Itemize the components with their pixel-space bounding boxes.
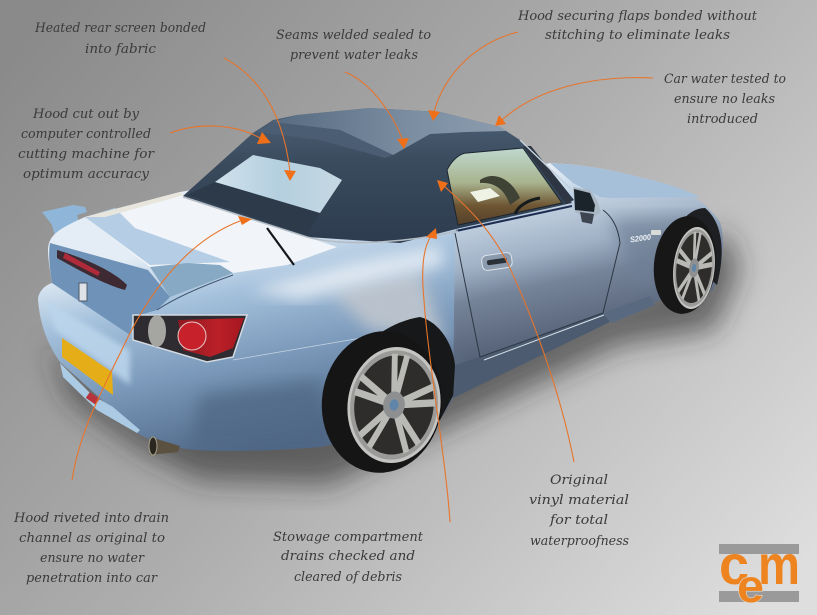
- front wheel: [649, 213, 721, 317]
- fender crease: [233, 337, 367, 360]
- label: original vinyl: for total: [549, 513, 608, 528]
- door outline: [455, 210, 620, 357]
- ground shadow: [48, 230, 740, 485]
- label: original vinyl: Original: [550, 473, 608, 488]
- arrow: original vinyl: [437, 180, 574, 462]
- arrow: heated rear screen: [224, 58, 296, 181]
- label: hood riveted: [13, 511, 169, 586]
- label: hood cut out: [18, 107, 155, 182]
- arrow: riveted: [72, 216, 252, 480]
- roof light top: [272, 108, 506, 155]
- exhaust: [149, 437, 180, 455]
- marker light: [651, 230, 661, 235]
- soft top: [183, 108, 574, 243]
- label: securing flaps: Hood securing flaps bonded without: [517, 9, 758, 24]
- label: stowage compartment: drains checked and: [281, 549, 415, 564]
- deck shading: [85, 208, 230, 265]
- deck top trim: [85, 192, 184, 217]
- label: water tested: [664, 72, 786, 127]
- number plate: [62, 338, 113, 395]
- chrome strip: [183, 197, 458, 243]
- label: hood cut out: computer controlled: [21, 127, 151, 142]
- label: hood riveted: penetration into car: [26, 571, 158, 586]
- interior steering wheel: [515, 198, 540, 214]
- rear panel: [49, 243, 170, 335]
- rear screen glass: [215, 155, 342, 213]
- door mirror: [573, 187, 601, 224]
- centre brake light: [57, 250, 127, 290]
- label: hood riveted: channel as original to: [19, 531, 165, 546]
- label: seams welded: prevent water leaks: [290, 48, 418, 63]
- arrow: securing flaps: [428, 32, 518, 121]
- label: hood cut out: cutting machine for: [18, 147, 155, 162]
- car with ground shadow: [38, 108, 740, 485]
- label: heated rear screen: into fabric: [85, 42, 157, 57]
- label: original vinyl: waterproofness: [530, 534, 629, 549]
- rear wheel: [313, 323, 451, 481]
- label: stowage compartment: Stowage compartment: [273, 530, 424, 545]
- label: hood riveted: ensure no water: [40, 551, 145, 566]
- label: hood cut out: Hood cut out by: [32, 107, 140, 122]
- antenna: [267, 228, 294, 265]
- label: securing flaps: stitching to eliminate leaks: [545, 28, 730, 43]
- door handle: [481, 252, 513, 271]
- body light and shade: [45, 190, 730, 450]
- side sill: [453, 313, 610, 398]
- badge: [79, 283, 87, 301]
- windscreen frame highlight: [520, 140, 574, 192]
- window sill line: [456, 206, 572, 231]
- label: water tested: Car water tested to: [664, 72, 786, 87]
- car body: [38, 163, 723, 451]
- label: securing flaps: [517, 9, 758, 43]
- rear deck highlight: [85, 192, 337, 273]
- rear spoiler left: [42, 205, 90, 240]
- label: heated rear screen: Heated rear screen bonded: [34, 21, 206, 36]
- trunk seam: [157, 275, 233, 310]
- label: stowage compartment: cleared of debris: [294, 570, 402, 585]
- side glass: [447, 148, 562, 225]
- label: water tested: ensure no leaks: [674, 92, 775, 107]
- model badge: S2000: [630, 232, 652, 244]
- label: water tested: introduced: [687, 112, 758, 127]
- front hood: [550, 163, 700, 198]
- label: stowage compartment: [273, 530, 424, 585]
- arrow: water tested: [495, 78, 653, 126]
- logo: cem: c: [719, 533, 749, 596]
- label: original vinyl: vinyl material: [529, 493, 629, 508]
- label: hood riveted: Hood riveted into drain: [13, 511, 169, 526]
- logo: cem: m: [758, 533, 800, 596]
- label: seams welded: Seams welded sealed to: [276, 28, 431, 43]
- front wheel arch: [664, 208, 722, 285]
- lower bumper: [60, 363, 140, 433]
- arrow: stowage: [423, 228, 450, 522]
- rear screen fabric: [187, 182, 320, 235]
- pillar: [523, 146, 574, 204]
- roof fabric: [183, 108, 572, 243]
- label: seams welded: [276, 28, 431, 63]
- tail light: [133, 315, 247, 362]
- label: original vinyl: [529, 473, 629, 549]
- label: hood cut out: optimum accuracy: [23, 167, 150, 182]
- arrow: seams: [345, 72, 409, 149]
- roof side panel: [256, 122, 393, 158]
- interior dash: [480, 176, 520, 205]
- rear wheel arch: [326, 317, 455, 420]
- logo: cem: [719, 533, 800, 612]
- label: heated rear screen: [34, 21, 206, 57]
- spoiler right fin: [150, 263, 233, 297]
- logo: cem: e: [737, 560, 764, 612]
- reflector: [86, 392, 100, 405]
- arrow: cut out: [170, 126, 271, 144]
- interior highlights: [470, 188, 500, 202]
